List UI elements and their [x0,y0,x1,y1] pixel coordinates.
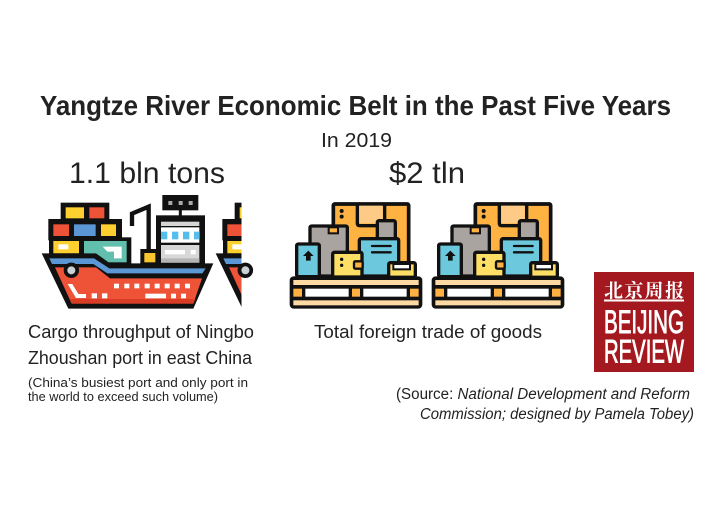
stat: $2 tln: $2 tln [389,157,465,190]
subtitle: In 2019: In 2019 [321,130,392,152]
icon: cropped second cargo ship [216,197,387,309]
caption: cargo throughput: Zhoushan port in east China [28,348,253,368]
caption: cargo throughput: Cargo throughput of Ningbo [28,322,254,342]
icon: cargo ship [42,197,213,309]
source note: (Source: National Development and Reform [396,386,690,403]
note: busiest port [28,375,248,404]
icon: pallet of goods 1 [290,204,422,309]
stat: 1.1 bln tons: 1.1 bln tons [69,157,225,190]
caption: cargo throughput [28,322,254,368]
title: Yangtze River Economic Belt in the Past Five Years [40,90,671,121]
logo: Beijing Review [594,272,694,372]
note: busiest port: the world to exceed such volume) [28,389,218,404]
source note: Commission; designed by Pamela Tobey) [420,406,694,423]
note: busiest port: (China’s busiest port and only port in [28,375,248,390]
logo: Beijing Review: 北京周报 [604,276,684,303]
icon: pallet of goods 2 [432,204,564,309]
source note [396,386,694,423]
caption: foreign trade: Total foreign trade of goods [314,322,542,342]
